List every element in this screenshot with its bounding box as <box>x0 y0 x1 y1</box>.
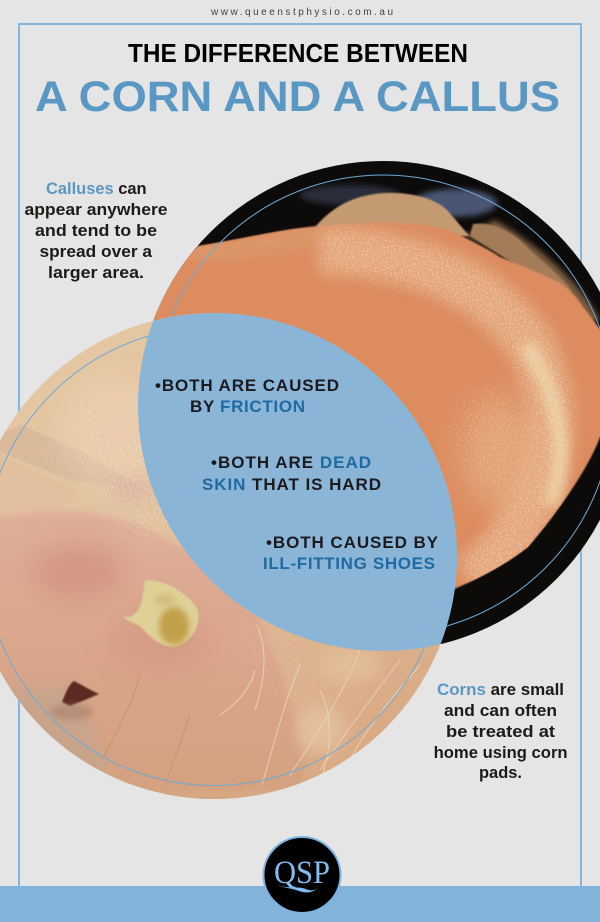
callout: calluses: appear anywhere <box>24 201 168 219</box>
foot crease <box>62 681 99 706</box>
callout: calluses: and tend to be <box>35 222 157 240</box>
callout: corns: pads. <box>479 764 522 782</box>
shared fact: dead skin <box>202 453 381 494</box>
toe body <box>0 511 305 800</box>
callout: calluses: spread over a <box>40 243 153 261</box>
callout: corns: Corns are small <box>437 681 564 699</box>
title line 2: A CORN AND A CALLUS <box>35 73 560 121</box>
photo: callus on heel <box>130 150 600 660</box>
ring: corn circle <box>0 326 444 786</box>
shared fact: friction: BY FRICTION <box>190 397 305 416</box>
shared fact: dead skin: SKIN THAT IS HARD <box>202 475 381 494</box>
website url: www.queenstphysio.com.au <box>210 7 393 18</box>
shared fact: friction: •BOTH ARE CAUSED <box>155 376 339 395</box>
overlap lens panel <box>138 313 457 651</box>
shared fact: shoes: •BOTH CAUSED BY <box>266 533 439 552</box>
logo: QSP badge <box>264 837 340 913</box>
logo: QSP badge: QSP <box>274 855 330 891</box>
toe folds <box>0 426 100 482</box>
callout: corns <box>434 681 568 782</box>
callout: corns: home using corn <box>434 744 568 762</box>
ring: callus circle <box>153 175 600 635</box>
footer bar <box>0 886 600 922</box>
photo: corn on foot <box>0 300 470 820</box>
callout: corns: be treated at <box>446 723 556 741</box>
icon: corn lesion <box>122 581 198 647</box>
callout: calluses <box>24 180 168 282</box>
callout: corns: and can often <box>444 702 557 720</box>
callout: calluses: larger area. <box>48 264 144 282</box>
shared fact: friction <box>155 376 339 416</box>
shared fact: shoes: ILL-FITTING SHOES <box>263 554 435 573</box>
title <box>35 38 560 121</box>
callout: calluses: Calluses can <box>46 180 147 198</box>
shared fact: shoes <box>263 533 439 573</box>
lower shadow <box>10 684 106 770</box>
title line 1: THE DIFFERENCE BETWEEN <box>128 38 468 68</box>
shared fact: dead skin: •BOTH ARE DEAD <box>211 453 371 472</box>
